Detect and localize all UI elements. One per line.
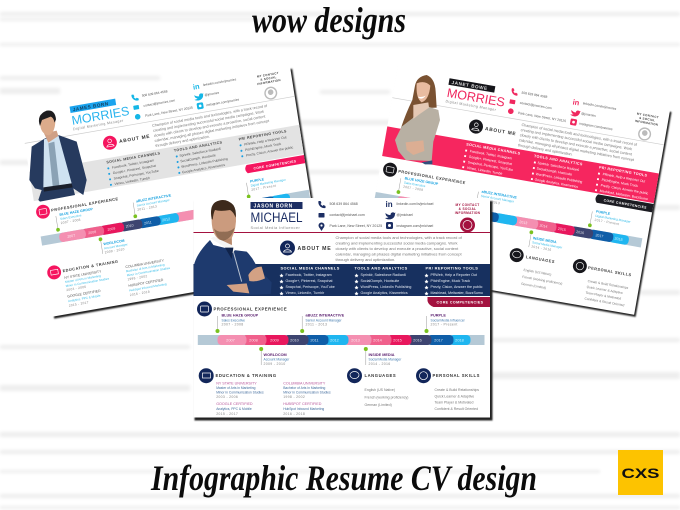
education and training: GOOGLE CERTIFIED [67, 289, 101, 299]
professional experience: 2017 - Present [430, 323, 458, 327]
about me: calendar, managing all phases digital marketing initiatives from concept [336, 252, 462, 256]
about me: ABOUT ME [119, 134, 151, 145]
career timeline: 2013 [351, 338, 360, 342]
languages: German (Limited) [521, 282, 546, 290]
about me: creating and implementing successful social media campaigns. Work [520, 128, 632, 151]
education and training: 1998 - 2002 [127, 274, 148, 282]
about me: through delivery and optimization. [155, 135, 210, 148]
contact details [507, 87, 617, 132]
education and training: EDUCATION & TRAINING [216, 373, 277, 378]
education and training: 2015 - 2017 [216, 412, 238, 416]
education and training: 2016 - 2018 [130, 290, 150, 297]
personal skills: Create & Build Relationships [587, 279, 629, 290]
contact details: in [192, 82, 201, 92]
skills band: PR/ REPORTING TOOLS [426, 266, 478, 270]
career timeline: 2018 [455, 338, 464, 342]
career timeline: 2015 [393, 338, 402, 342]
professional experience: Social Media Influencer [430, 318, 466, 322]
professional experience: Senior Account Manager [480, 194, 514, 204]
professional experience: 2011 - 2013 [137, 204, 157, 212]
personal skills: Confident & Result Oriented [584, 297, 625, 307]
skills band: Google+, Pinterest, Snapchat [468, 155, 512, 166]
career timeline [38, 172, 313, 264]
contact heading and seal [455, 203, 481, 232]
professional experience: PROFESSIONAL EXPERIENCE [214, 306, 287, 312]
skills band: Facebook, Twitter, Instagram [469, 149, 513, 160]
education and training: Bachelor of Arts in Marketing [126, 263, 165, 273]
career timeline: 2012 [162, 217, 170, 222]
professional experience: Sales Executive [60, 213, 82, 221]
education and training: Minor in Communication Studies [283, 390, 331, 394]
about me: ABOUT ME [298, 246, 332, 252]
career timeline: 2011 [310, 338, 319, 342]
personal skills: Team Player & Motivated [434, 401, 473, 405]
personal skills: Create & Build Relationships [434, 388, 479, 392]
professional experience: 2017 - Present [251, 184, 276, 192]
education and training: Analytics, PPC & Mobile [216, 407, 252, 411]
skills band: Vimeo, LinkedIn, Tumblr [114, 176, 151, 186]
about me: closely with clients to develop and execute a proactive, social content [154, 115, 266, 138]
contact heading and seal: & SOCIAL [459, 207, 476, 211]
contact details: in [572, 97, 581, 108]
inside media entry: 2014 - 2016 [531, 244, 552, 252]
skills band: PRWeb, Help a Reporter Out [602, 172, 646, 184]
skills band: SocialOomph, Hootsuite [180, 153, 216, 163]
skills band: SocialOomph, Hootsuite [536, 166, 573, 177]
career timeline: 2014 [373, 338, 383, 342]
education and training: 2003 - 2006 [66, 285, 87, 292]
name block: Social Media Influencer [250, 225, 300, 230]
about me [101, 104, 271, 157]
contact heading and seal: INFORMATION [257, 78, 281, 86]
professional experience: aBUZZ INTERACTIVE [136, 193, 172, 203]
personal skills: PERSONAL SKILLS [432, 373, 480, 378]
about me: calendar, managing all phases digital marketing initiatives from concept [519, 138, 634, 162]
contact heading and seal: MY CONTACT [637, 112, 659, 119]
career timeline: 2010 [290, 338, 300, 342]
languages: German (Limited) [364, 403, 392, 407]
education and training: COLUMBIA UNIVERSITY [283, 382, 326, 386]
contact heading and seal: INFORMATION [455, 211, 481, 215]
worldcom entry: 2009 - 2010 [104, 247, 125, 254]
languages: LANGUAGES [525, 254, 555, 264]
contact details [318, 200, 434, 231]
professional experience: BLUE HAZE GROUP [59, 207, 94, 217]
skills band: WordPress, LinkedIn Publishing [360, 285, 411, 289]
contact details: @jmorries [581, 111, 596, 118]
contact heading and seal: & SOCIAL [639, 116, 656, 123]
professional experience: 2007 - 2008 [222, 323, 243, 327]
logo: CXS badge [618, 450, 663, 495]
career timeline: 2018 [614, 237, 623, 242]
skills band: PRWeb, Help a Reporter Out [244, 135, 287, 147]
career timeline: 2016 [576, 230, 584, 235]
contact details: 508 639 864 4568 [521, 91, 548, 99]
education and training: GOOGLE CERTIFIED [216, 402, 253, 406]
career timeline: 2007 [226, 338, 235, 342]
education and training: Bachelor of Arts in Marketing [283, 386, 326, 390]
contact details: linkedin.com/in/jmorries [583, 101, 617, 111]
education and training [46, 246, 174, 310]
title: Infographic Resume CV design: Infographic Resume CV design [150, 458, 537, 498]
skills band: SOCIAL MEDIA CHANNELS [466, 142, 521, 156]
skills band: Prezly, Cision, Answer the public [246, 145, 294, 158]
name block [445, 78, 507, 113]
contact details: contact@jmorries.com [519, 101, 552, 110]
worldcom entry: WORLDCOM [103, 239, 125, 246]
career timeline: 2008 [249, 338, 258, 342]
personal skills [567, 258, 633, 308]
career timeline: 2010 [125, 223, 134, 229]
skills band: Google+, Pinterest, Snapchat [286, 279, 333, 283]
education and training: 2016 - 2018 [283, 412, 305, 416]
about me: creating and implementing successful social media campaigns. Work [153, 110, 264, 133]
skills band [29, 125, 304, 201]
core competencies tag: CORE COMPETENCIES [253, 159, 297, 171]
career timeline: 2012 [330, 338, 339, 342]
professional experience: PURPLE [596, 210, 611, 216]
education and training: NY STATE UNIVERSITY [64, 269, 102, 280]
inside media entry: INSIDE MEDIA [533, 236, 557, 244]
languages [505, 247, 567, 293]
education and training: Master of Arts in Marketing [216, 386, 256, 390]
education and training: 2015 - 2017 [68, 300, 89, 308]
skills band: SocialOomph, Hootsuite [360, 279, 399, 283]
skills band: Vimeo, LinkedIn, Tumblr [467, 166, 504, 176]
career timeline: 2013 [519, 220, 528, 225]
skills band: PitchEngine, Muck Track [245, 142, 282, 152]
education and training: Minor in Communication Studies [216, 390, 264, 394]
career timeline [198, 316, 485, 365]
skills band: Prezly, Cision, Answer the public [600, 183, 649, 196]
skills band: Google Analytics, Kissmetrics [534, 178, 579, 189]
contact details: linkedin.com/in/jmorries [203, 77, 237, 87]
career timeline: 2009 [107, 227, 116, 232]
about me: through delivery and optimization. [336, 257, 395, 262]
skills band: TOOLS AND ANALYTICS [174, 140, 223, 153]
logo: CXS badge: CXS [622, 465, 660, 481]
about me: creating and implementing successful social media campaigns. Work [336, 240, 457, 246]
professional experience: Senior Account Manager [136, 198, 170, 208]
education and training [199, 368, 331, 416]
worldcom and inside media entries: Account Manager [264, 358, 290, 362]
personal skills: Quick Learner & Adaptive [586, 285, 623, 295]
contact details: instagram.com/jmorries [579, 122, 613, 131]
name block: MORRIES [71, 104, 130, 128]
skills band [382, 126, 659, 203]
core competencies tag [595, 194, 654, 212]
worldcom entry [103, 238, 129, 254]
personal skills: Team Player & Motivated [585, 291, 622, 301]
skills band: Mashlead, Meltwater, BuzzSumo [599, 189, 648, 201]
title: wow designs: wow designs [252, 0, 406, 40]
skills band: Snapchat, Periscope, YouTube [113, 169, 159, 181]
education and training: 1998 - 2002 [283, 395, 305, 399]
name block [250, 202, 303, 230]
languages [347, 368, 408, 407]
skills band: SOCIAL MEDIA CHANNELS [280, 266, 340, 270]
skills band: SOCIAL MEDIA CHANNELS [106, 151, 161, 165]
career timeline: 2008 [88, 230, 96, 235]
career timeline: 2017 [434, 338, 443, 342]
contact details: instagram.com/jmichael [396, 224, 433, 228]
career timeline: 2009 [270, 338, 279, 342]
name block: Digital Marketing Manager [73, 119, 124, 131]
inside media entry: Social Media Manager [532, 240, 563, 250]
worldcom and inside media entries: Social Media Manager [368, 358, 402, 362]
career timeline: 2015 [557, 227, 566, 232]
about me: calendar, managing all phases digital marketing initiatives from concept [154, 119, 269, 143]
professional experience: Digital Marketing Manager [250, 178, 286, 188]
professional experience: 2011 - 2013 [306, 323, 327, 327]
name block: JANET BOWE [451, 80, 488, 91]
skills band: Facebook, Twitter, Instagram [112, 158, 155, 170]
contact details: in [386, 200, 393, 209]
education and training: EDUCATION & TRAINING [62, 259, 119, 273]
professional experience: aBUZZ INTERACTIVE [481, 190, 518, 200]
career timeline: 2011 [144, 220, 152, 226]
contact details: 508 639 864 4568 [142, 89, 168, 98]
skills band: Snapchat, Periscope, YouTube [286, 285, 335, 289]
about me: Champion of social media tools and technologies, with a track record of [152, 104, 268, 128]
personal skills: Confident & Result Oriented [434, 407, 478, 411]
contact details: @jmorries [204, 91, 220, 97]
education and training: Master of Arts in Marketing [65, 274, 101, 284]
languages: English (US Native) [364, 388, 395, 392]
about me: closely with clients to develop and execute a proactive, social content [519, 133, 632, 157]
skills band: PRWeb, Help a Reporter Out [430, 273, 477, 277]
contact details: @jmichael [396, 213, 413, 217]
core competencies tag [428, 297, 490, 307]
languages: French (working proficiency) [364, 396, 408, 400]
skills band: PR/ REPORTING TOOLS [238, 129, 287, 141]
contact details: Park Lane, New Street, NY 20125 [145, 106, 193, 118]
education and training: HUBSPOT CERTIFIED [128, 278, 164, 288]
right resume card [362, 63, 672, 317]
personal skills: Quick Learner & Adaptive [434, 394, 474, 398]
contact details: Park Lane, New Street, NY 20125 [330, 224, 382, 228]
about me: Champion of social media tools and technologies, with a track record of [521, 123, 638, 147]
education and training: COLUMBIA UNIVERSITY [125, 258, 165, 269]
languages: French (working proficiency) [522, 275, 563, 286]
about me [280, 235, 463, 262]
about me: ABOUT ME [484, 126, 517, 137]
professional experience: PURPLE [430, 314, 446, 318]
skills band: PitchEngine, Muck Track [601, 178, 639, 188]
skills band: Prezly, Cision, Answer the public [430, 285, 483, 289]
name block: JASON BORN [254, 204, 293, 210]
contact heading and seal [632, 111, 660, 142]
contact details: 508 639 864 4568 [330, 202, 358, 206]
worldcom and inside media entries [264, 353, 402, 366]
professional experience: BLUE HAZE GROUP [222, 314, 259, 318]
worldcom and inside media entries: WORLDCOM [264, 353, 287, 357]
left resume card [20, 65, 324, 319]
contact details: linkedin.com/in/jmichael [396, 202, 434, 206]
professional experience [35, 163, 287, 229]
education and training: Analytics, PPC & Mobile [68, 293, 101, 303]
worldcom and inside media entries: 2009 - 2010 [264, 362, 285, 366]
education and training: HUBSPOT CERTIFIED [283, 402, 322, 406]
skills band: PR/ REPORTING TOOLS [599, 165, 648, 178]
worldcom and inside media entries: 2014 - 2016 [368, 362, 390, 366]
education and training: HubSpot Inbound Marketing [283, 407, 324, 411]
name block: JAMES BORN [72, 101, 109, 112]
career timeline: 2017 [595, 233, 604, 239]
photo: man with crossed arms [194, 200, 272, 296]
professional experience: PURPLE [250, 177, 265, 184]
contact details: contact@jmichael.com [330, 213, 365, 217]
skills band: Mashlead, Meltwater, BuzzSumo [430, 291, 483, 295]
name block [70, 97, 131, 131]
skills band: Google+, Pinterest, Snapchat [113, 164, 156, 175]
professional experience: Sales Executive [222, 318, 245, 322]
worldcom entry: Account Manager [104, 242, 128, 250]
languages: LANGUAGES [364, 373, 396, 378]
about me: closely with clients to develop and execute a proactive, social content [336, 246, 459, 251]
education and training: Minor in Communication Studies [126, 266, 171, 277]
personal skills [416, 368, 480, 411]
skills band: TOOLS AND ANALYTICS [354, 266, 408, 270]
main resume card [194, 198, 492, 420]
skills band: Sprinklr, Salesforce Radian6 [537, 161, 580, 172]
languages: English (US Native) [523, 268, 552, 277]
skills band: Sprinklr, Salesforce Radian6 [360, 273, 406, 277]
name block: Digital Marketing Manager [445, 99, 497, 112]
professional experience [197, 302, 466, 327]
name block: MORRIES [446, 86, 506, 110]
about me: through delivery and optimization. [518, 143, 573, 157]
professional experience: Digital Marketing Manager [595, 214, 631, 224]
inside media entry [531, 236, 563, 254]
core competencies tag: CORE COMPETENCIES [436, 300, 484, 304]
professional experience: Senior Account Manager [306, 318, 343, 322]
photo: standing man on left card [29, 111, 87, 202]
skills band: Vimeo, LinkedIn, Tumblr [286, 291, 325, 295]
contact details: Park Lane, New Street, NY 20125 [518, 111, 567, 123]
skills band [194, 264, 490, 296]
professional experience: 2017 - Present [594, 218, 620, 226]
core competencies tag [245, 155, 305, 174]
contact details: contact@jmorries.com [143, 98, 176, 108]
skills band: Sprinklr, Salesforce Radian6 [179, 147, 221, 158]
skills band: Snapchat, Periscope, YouTube [468, 160, 513, 172]
core competencies tag: CORE COMPETENCIES [603, 198, 647, 210]
skills band: Google Analytics, Kissmetrics [360, 291, 408, 295]
professional experience: BLUE HAZE GROUP [404, 176, 439, 186]
photo: woman on right card [395, 75, 440, 164]
contact heading and seal [256, 71, 283, 102]
education and training: 2003 - 2006 [216, 395, 238, 399]
contact heading and seal: INFORMATION [635, 119, 659, 127]
professional experience: 2011 - 2013 [480, 198, 500, 205]
about me: Champion of social media tools and technologies, with a track record of [336, 235, 463, 240]
education and training: NY STATE UNIVERSITY [216, 382, 257, 386]
career timeline: 2007 [67, 234, 76, 239]
professional experience [380, 162, 634, 228]
professional experience: 2007 - 2008 [403, 185, 424, 192]
contact heading and seal: & SOCIAL [260, 75, 277, 82]
skills band: WordPress, LinkedIn Publishing [535, 172, 583, 184]
personal skills: PERSONAL SKILLS [588, 265, 632, 277]
professional experience: Sales Executive [404, 181, 426, 188]
education and training: HubSpot Inbound Marketing [129, 282, 167, 292]
skills band: TOOLS AND ANALYTICS [534, 154, 583, 167]
professional experience: aBUZZ INTERACTIVE [306, 314, 345, 318]
about me [467, 114, 638, 167]
career timeline: 2014 [539, 224, 548, 229]
professional experience: 2007 - 2008 [60, 218, 81, 225]
skills band: WordPress, LinkedIn Publishing [181, 157, 228, 169]
professional experience: PROFESSIONAL EXPERIENCE [51, 196, 119, 213]
skills band: Google Analytics, Kissmetrics [182, 163, 226, 174]
name block: MICHAEL [250, 210, 303, 225]
skills band: Facebook, Twitter, Instagram [286, 273, 332, 277]
career timeline [371, 174, 645, 266]
contact details: instagram.com/jmorries [206, 97, 240, 107]
contact heading and seal: MY CONTACT [456, 203, 479, 207]
contact details [131, 75, 240, 120]
worldcom and inside media entries: INSIDE MEDIA [368, 353, 395, 357]
contact heading and seal: MY CONTACT [257, 71, 279, 79]
skills band: PitchEngine, Muck Track [430, 279, 470, 283]
career timeline: 2016 [413, 338, 422, 342]
education and training: Minor in Communication Studies [65, 276, 110, 288]
professional experience: PROFESSIONAL EXPERIENCE [398, 169, 466, 185]
